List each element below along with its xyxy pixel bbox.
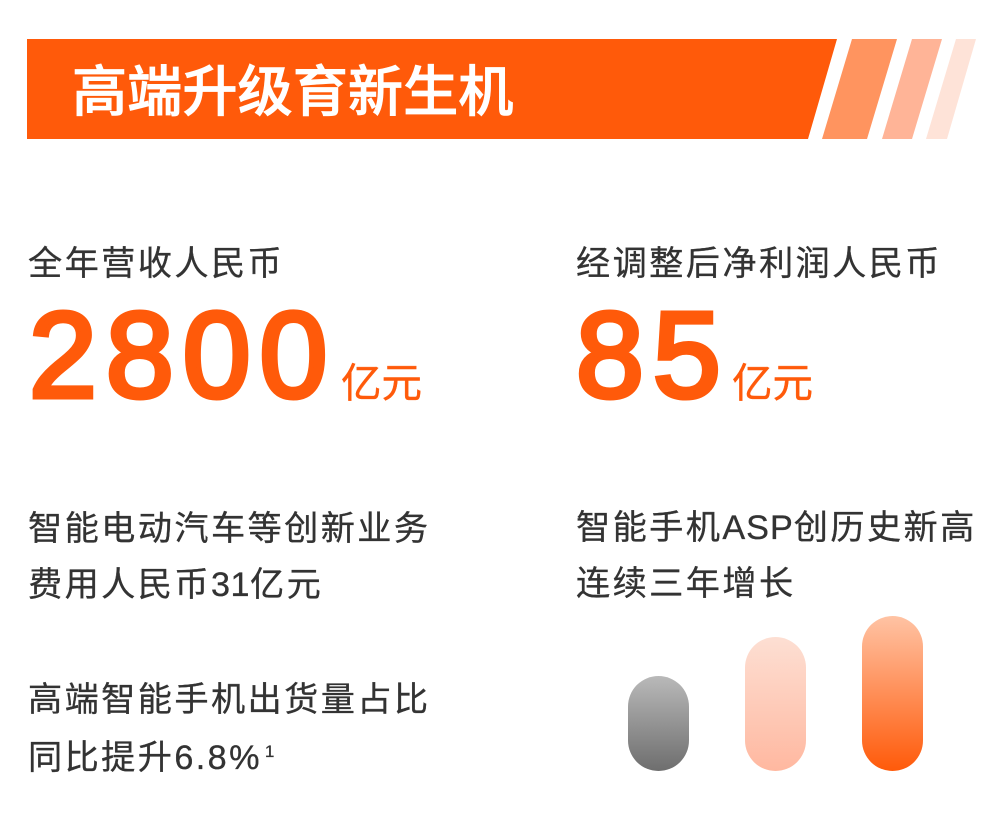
text: innovation expenses: 费用人民币31亿元 [28, 566, 323, 604]
text: innovation expenses: 智能电动汽车等创新业务 [28, 510, 430, 548]
pill: year one [628, 676, 689, 771]
revenue unit: 亿元 [341, 360, 422, 406]
profit value: 85 [576, 287, 730, 423]
pill: year two [745, 637, 806, 771]
text: premium smartphone share: 同比提升6.8%1 [28, 739, 277, 777]
profit unit: 亿元 [732, 360, 813, 406]
text: smartphone ASP record: 连续三年增长 [576, 564, 796, 602]
text: premium smartphone share: 高端智能手机出货量占比 [28, 681, 430, 719]
text: smartphone ASP record: 智能手机ASP创历史新高 [576, 509, 977, 547]
metric: full-year revenue [28, 245, 422, 423]
revenue value: 2800 [29, 287, 336, 423]
text: innovation expenses [28, 510, 430, 604]
metric: adjusted net profit [576, 245, 942, 423]
title: 高端升级育新生机 [72, 61, 514, 123]
text: premium smartphone share [28, 681, 430, 777]
profit label: 经调整后净利润人民币 [576, 245, 942, 283]
revenue label: 全年营收人民币 [28, 245, 284, 283]
text: smartphone ASP record [576, 509, 977, 602]
chart: ASP growth pills [628, 616, 923, 771]
pill: year three [862, 616, 923, 771]
